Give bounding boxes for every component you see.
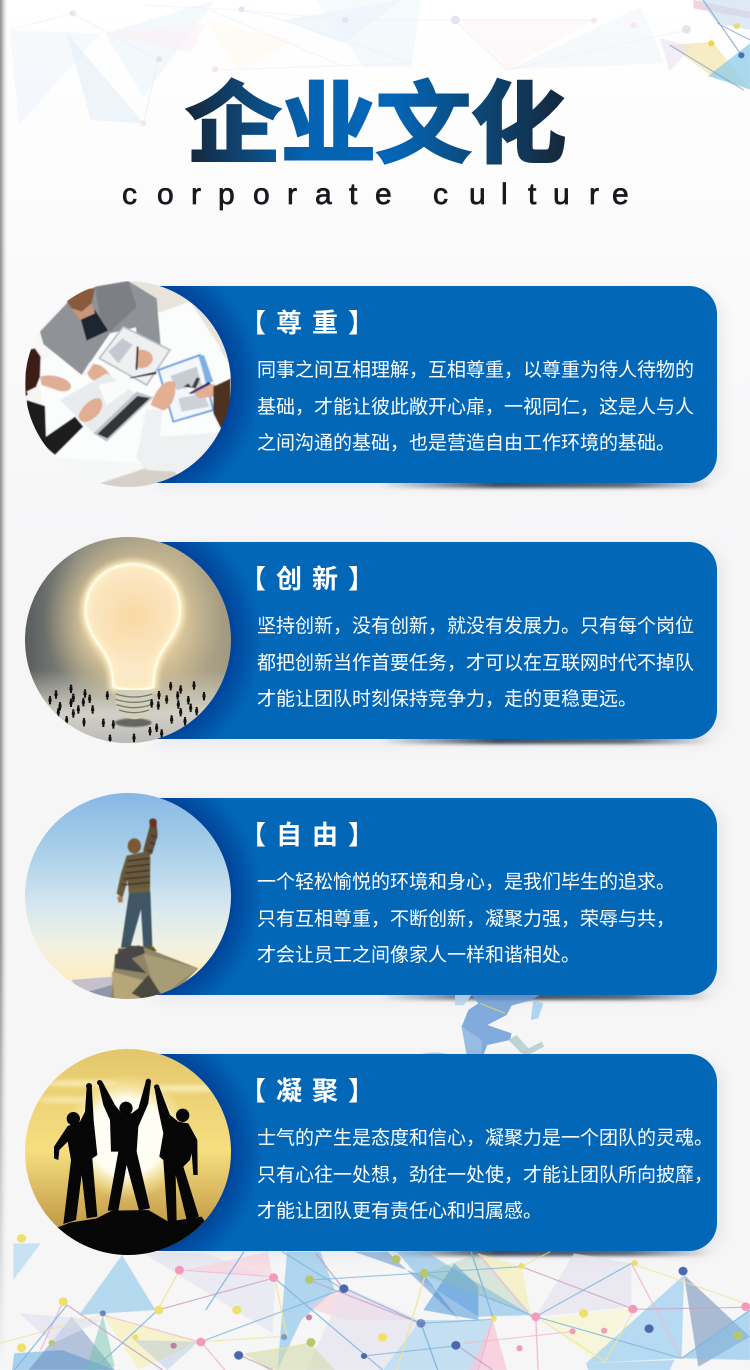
photo: light bulb [25, 537, 231, 743]
body text: 创新: 坚持创新，没有创新，就没有发展力。只有每个岗位 [257, 616, 694, 637]
right person [151, 381, 175, 411]
heading: 凝聚: 【凝聚】 [240, 1076, 384, 1106]
panel: 自由 [150, 798, 717, 995]
person middle [97, 1079, 151, 1211]
bulb [86, 564, 180, 690]
person left [54, 1083, 97, 1224]
left person [25, 348, 41, 397]
rock [110, 945, 198, 1005]
man [117, 818, 158, 955]
body text: 凝聚: 士气的产生是态度和信心，凝聚力是一个团队的灵魂。 [257, 1128, 713, 1149]
body text: 尊重: 基础，才能让彼此敞开心扉，一视同仁，这是人与人 [257, 396, 694, 418]
crowd [48, 681, 206, 743]
heading: 自由: 【自由】 [240, 820, 384, 850]
body text: 尊重: 同事之间互相理解，互相尊重，以尊重为待人待物的 [257, 360, 694, 381]
subtitle: corporate culture: corporate culture [122, 178, 629, 211]
photo: man on summit [25, 793, 231, 999]
body text: 自由 [257, 872, 675, 966]
hill [58, 1210, 204, 1255]
laptop [60, 373, 135, 433]
panel: 创新 [150, 542, 717, 739]
panel: 凝聚 [150, 1054, 717, 1251]
body text: 创新: 才能让团队时刻保持竞争力，走的更稳更远。 [257, 689, 637, 710]
body text: 凝聚: 才能让团队更有责任心和归属感。 [257, 1201, 542, 1222]
body text: 自由: 才会让员工之间像家人一样和谐相处。 [257, 945, 580, 966]
body text: 自由: 只有互相尊重，不断创新，凝聚力强，荣辱与共， [257, 908, 675, 930]
title [122, 54, 629, 211]
heading: 创新: 【创新】 [240, 564, 384, 594]
body text: 尊重: 之间沟通的基础，也是营造自由工作环境的基础。 [257, 433, 675, 454]
background figure: runner [417, 995, 544, 1055]
body text: 创新 [257, 616, 694, 710]
body text: 创新: 都把创新当作首要任务，才可以在互联网时代不掉队 [257, 652, 694, 674]
person right [154, 1084, 199, 1223]
documents [99, 327, 170, 385]
title: 企业文化: 企业文化 [186, 54, 566, 181]
top right triangles [660, 0, 750, 90]
photo: business meeting [25, 281, 231, 487]
top decorative network [10, 0, 750, 126]
body text: 尊重 [257, 360, 694, 454]
body text: 凝聚: 只有心往一处想，劲往一处使，才能让团队所向披靡， [257, 1164, 713, 1186]
bottom decorative network [0, 1234, 750, 1370]
body text: 自由: 一个轻松愉悦的环境和身心，是我们毕生的追求。 [257, 872, 675, 893]
heading: 尊重: 【尊重】 [240, 308, 384, 338]
photo: team silhouettes [25, 1049, 715, 1255]
panel: 尊重 [150, 286, 717, 483]
gray suit person [40, 281, 161, 375]
body text: 凝聚 [257, 1128, 713, 1222]
